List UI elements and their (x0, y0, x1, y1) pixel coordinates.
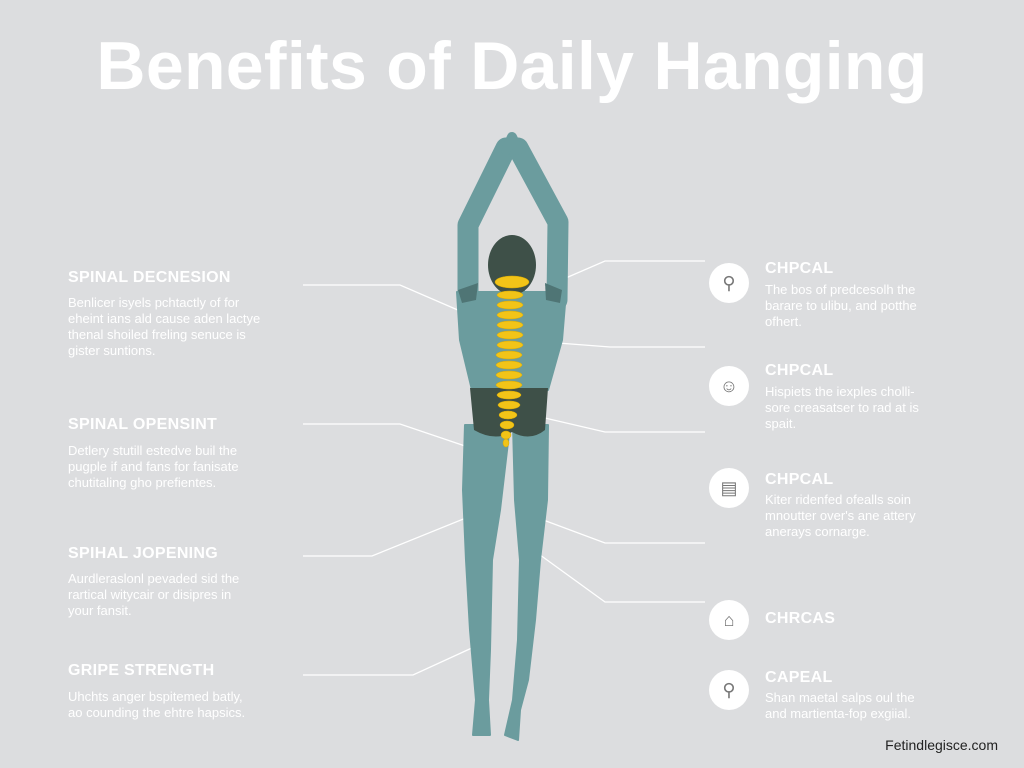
icon 5: ⚲ (722, 680, 736, 700)
text: Aurdleraslonl pevaded sid the (68, 571, 239, 586)
shoulders (458, 283, 562, 303)
left text: grip strength: GRIPE STRENGTH (68, 662, 214, 679)
icon 4 (709, 600, 749, 640)
connectors (303, 261, 705, 675)
left text: spinal jopening: SPIHAL JOPENING (68, 545, 218, 562)
right text 5: CAPEAL (765, 669, 833, 686)
text: and martienta-fop exgiial. (765, 706, 911, 721)
icon 3: ▤ (720, 478, 738, 498)
left text: spinal opening: SPINAL OPENSINT (68, 416, 217, 433)
text: anerays cornarge. (765, 524, 870, 539)
text: spait. (765, 416, 796, 431)
text: Kiter ridenfed ofealls soin (765, 492, 911, 507)
right text 2: CHPCAL (765, 362, 833, 379)
briefs (470, 388, 548, 437)
text: Hispiets the iexples cholli- (765, 384, 915, 399)
head (488, 235, 536, 295)
text: pugple if and fans for fanisate (68, 459, 239, 474)
text: ao counding the ehtre hapsics. (68, 705, 245, 720)
icon 1: ⚲ (722, 273, 736, 293)
text: eheint ians ald cause aden lactye (68, 311, 260, 326)
text: your fansit. (68, 603, 132, 618)
text: mnoutter over's ane attery (765, 508, 916, 523)
right text 4: CHRCAS (765, 610, 835, 627)
text: barare to ulibu, and potthe (765, 298, 917, 313)
right text 3: CHPCAL (765, 471, 833, 488)
text: The bos of predcesolh the (765, 282, 915, 297)
footer url: Fetindlegisce.com (885, 737, 998, 753)
icon 5 (709, 670, 749, 710)
text: rartical witycair or disipres in (68, 587, 231, 602)
text: Detlery stutill estedve buil the (68, 443, 237, 458)
icon 3 (709, 468, 749, 508)
text: Uhchts anger bspitemed batly, (68, 689, 243, 704)
text: gister suntions. (68, 343, 155, 358)
text: chutitaling gho prefientes. (68, 475, 216, 490)
left text: spinal decompression: SPINAL DECNESION (68, 269, 231, 286)
spine (495, 276, 529, 447)
text: sore creasatser to rad at is (765, 400, 919, 415)
title: Benefits of Daily Hanging (96, 28, 928, 104)
text: ofhert. (765, 314, 802, 329)
text: Benlicer isyels pchtactly of for (68, 295, 239, 310)
icon 2 (709, 366, 749, 406)
body (457, 137, 566, 740)
text: thenal shoiled freling senuce is (68, 327, 246, 342)
icon 4: ⌂ (724, 610, 734, 630)
right text 1: CHPCAL (765, 260, 833, 277)
text: Shan maetal salps oul the (765, 690, 915, 705)
icon 1 (709, 263, 749, 303)
icon 2: ☺ (720, 376, 738, 396)
